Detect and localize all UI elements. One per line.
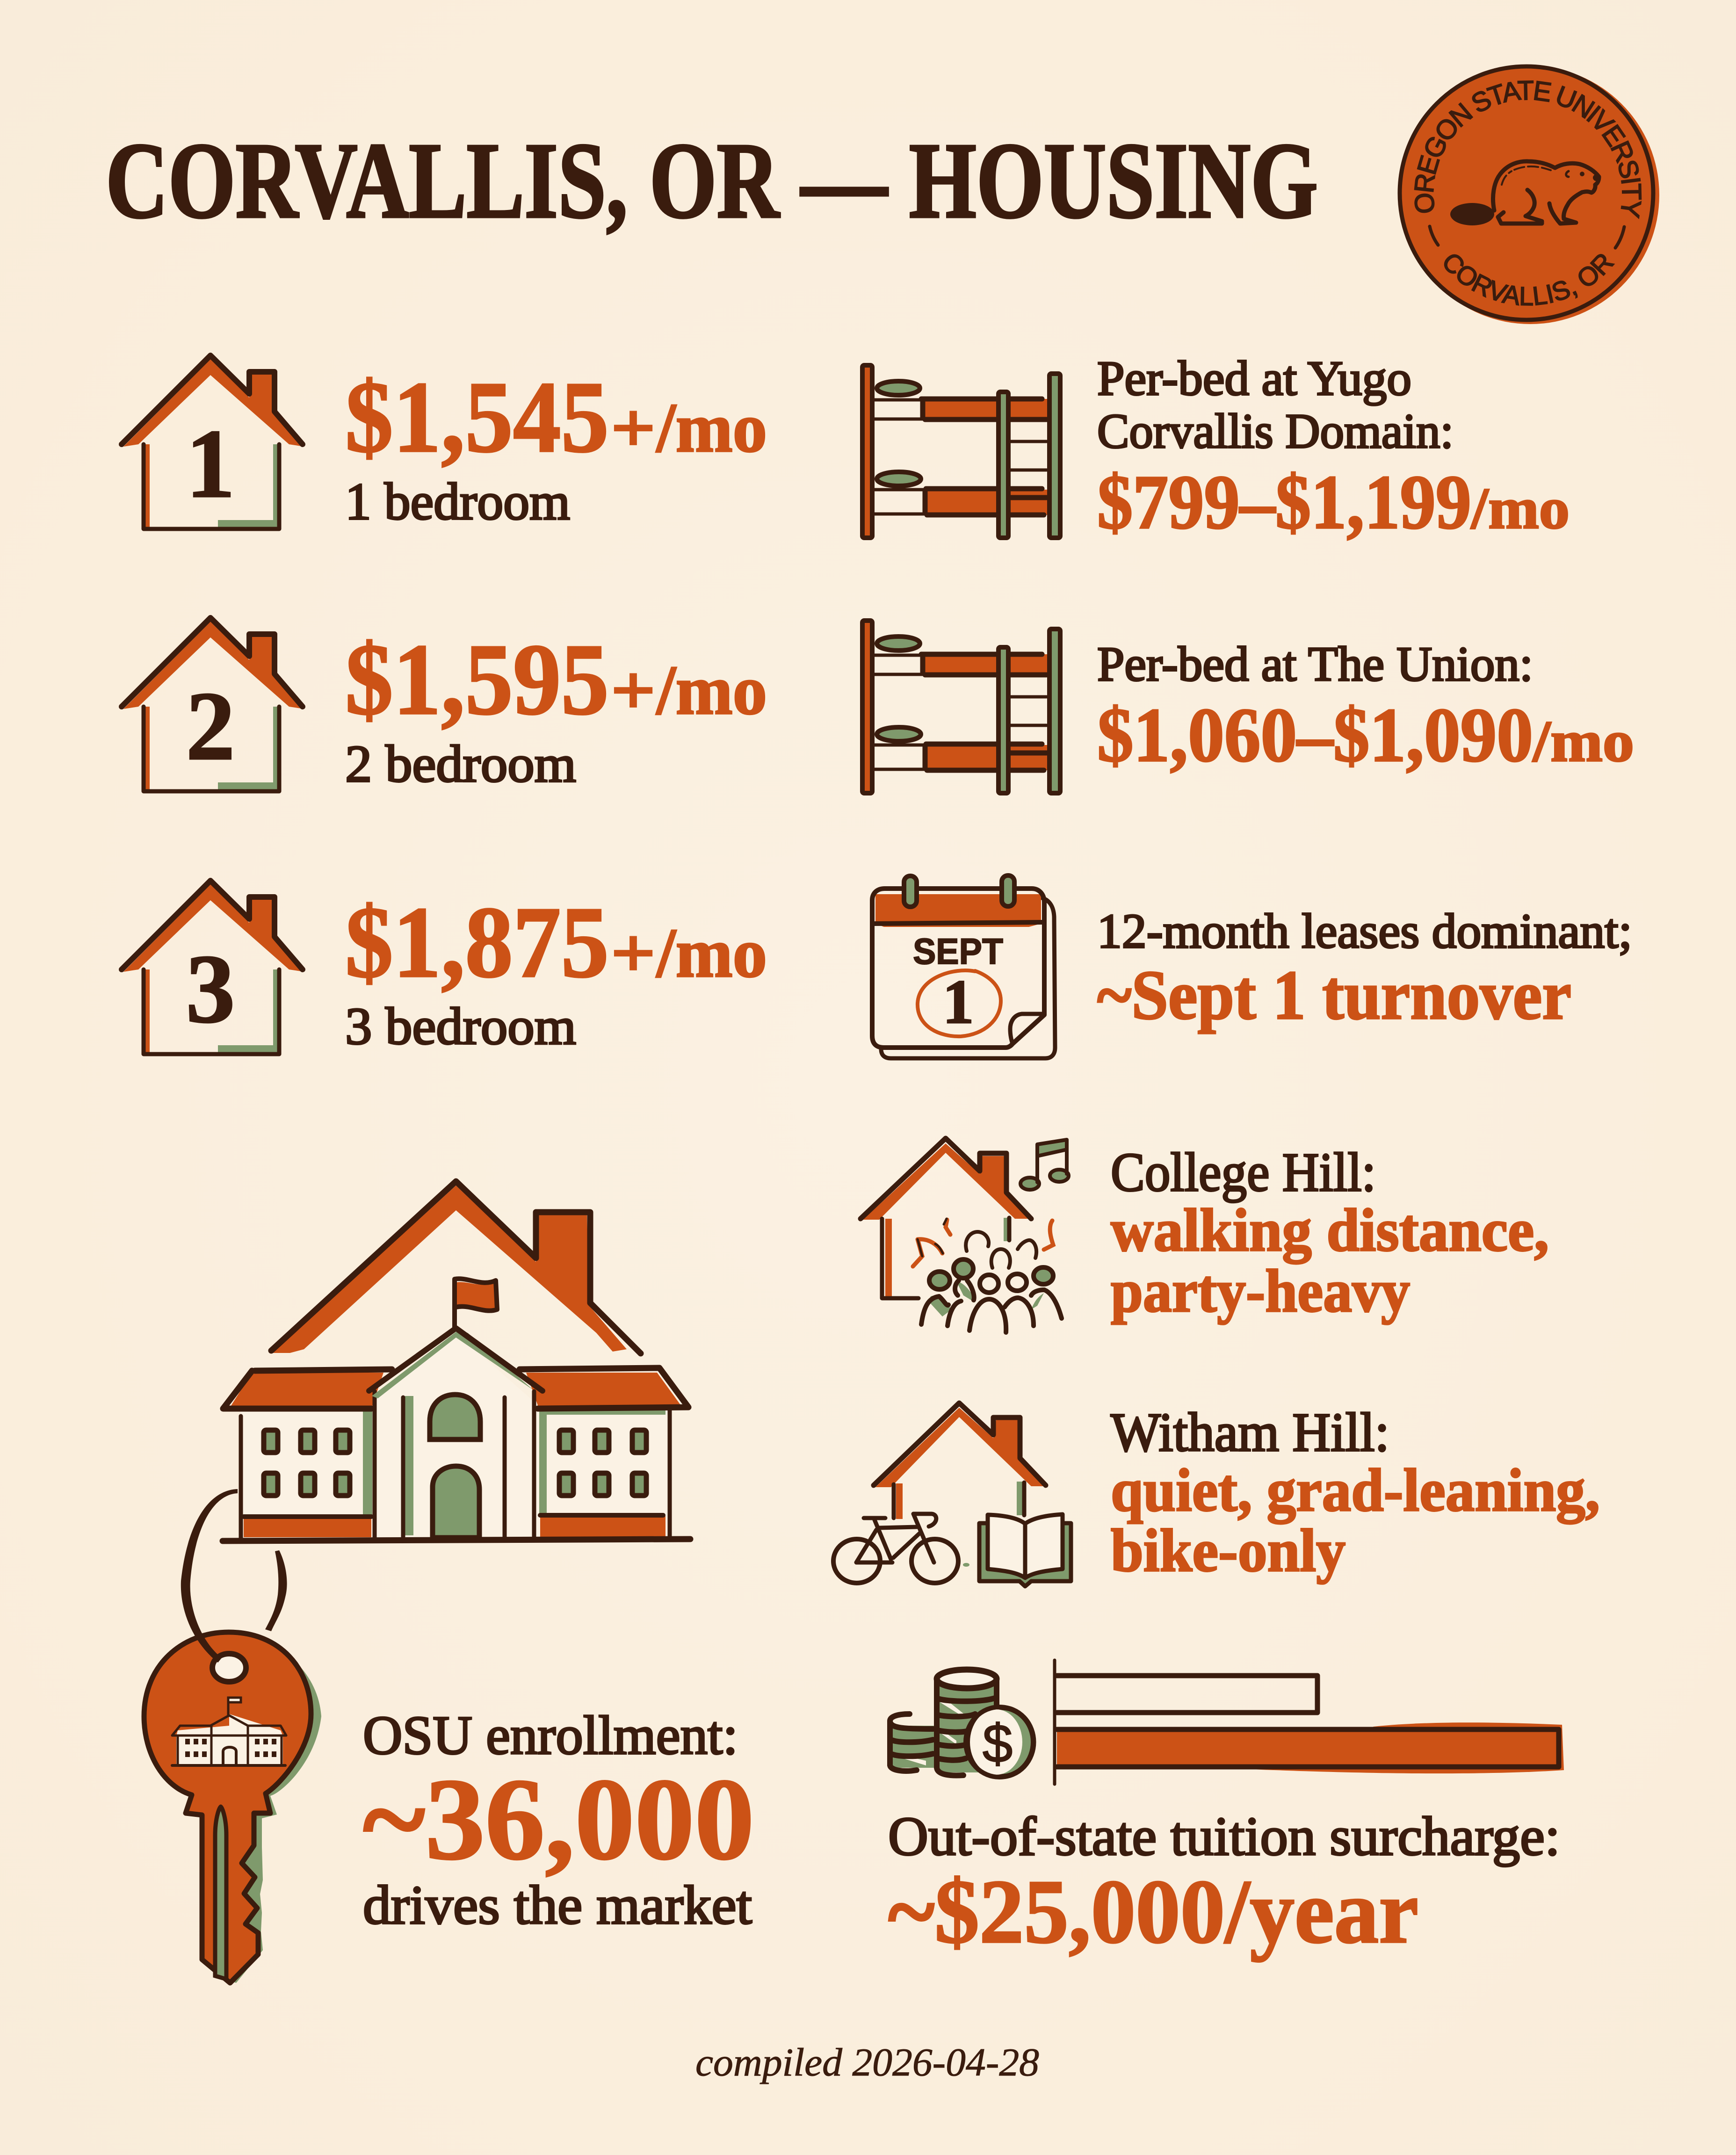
panel: 1 bedroom rent xyxy=(122,355,767,531)
title: CORVALLIS, OR — HOUSING xyxy=(106,121,1318,241)
icon: coin stacks xyxy=(890,1670,1034,1777)
music notes xyxy=(1020,1140,1069,1190)
icon: house 1: 1 xyxy=(186,410,235,518)
bar chart xyxy=(1055,1660,1564,1784)
text: College Hill: xyxy=(1111,1142,1376,1203)
text xyxy=(1097,351,1570,545)
panel: out-of-state tuition xyxy=(888,1660,1564,1962)
text xyxy=(1097,904,1632,1034)
orange confetti notes xyxy=(913,1219,1053,1266)
panel: The Union per-bed price xyxy=(862,621,1634,793)
dot xyxy=(963,1563,969,1567)
text: Per-bed at Yugo xyxy=(1097,351,1411,405)
icon: house 2: 2 xyxy=(186,672,235,781)
back row heads xyxy=(966,1232,1036,1268)
rent figure xyxy=(345,886,767,999)
wings xyxy=(223,1333,688,1539)
text: $1,060–$1,090 xyxy=(1097,692,1533,778)
flag xyxy=(455,1279,497,1328)
rent figure xyxy=(345,623,767,736)
icon: coin stacks: $ xyxy=(983,1713,1013,1774)
bicycle xyxy=(833,1514,958,1583)
text: Out-of-state tuition surcharge: xyxy=(888,1806,1560,1867)
central gable xyxy=(369,1328,542,1537)
icon: quiet house with bicycle and book xyxy=(833,1403,1071,1586)
arched window and door xyxy=(430,1395,480,1538)
text xyxy=(1111,1142,1549,1325)
icon: house 3: 3 xyxy=(186,935,235,1043)
panel: 3 bedroom rent xyxy=(122,881,767,1056)
seal text: bottom arc: CORVALLIS, OR xyxy=(1436,246,1619,311)
rent figure: $1,875 xyxy=(345,886,609,999)
icon: house 2 xyxy=(122,618,303,791)
icon: calendar: 1 xyxy=(943,967,974,1036)
panel: College Hill xyxy=(861,1138,1549,1332)
icon: house 3 xyxy=(122,881,303,1054)
text xyxy=(1097,636,1634,778)
text: quiet, grad-leaning, xyxy=(1111,1457,1600,1524)
rent figure: /mo xyxy=(656,651,767,729)
text: walking distance, xyxy=(1111,1197,1549,1264)
panel: OSU enrollment xyxy=(363,1705,754,1936)
icon: key xyxy=(144,1632,321,1983)
text xyxy=(888,1806,1560,1962)
rent figure: + xyxy=(611,651,656,729)
main roof xyxy=(271,1181,641,1353)
rent figure: /mo xyxy=(656,914,767,992)
text: /mo xyxy=(1470,477,1570,541)
icon: calendar xyxy=(872,875,1055,1058)
text: party-heavy xyxy=(1111,1258,1410,1325)
icon: party house xyxy=(861,1138,1069,1332)
panel: Witham Hill xyxy=(833,1402,1600,1586)
text: $799–$1,199 xyxy=(1097,459,1471,545)
panel: OSU enrollment: ~36,000 xyxy=(363,1755,754,1884)
rent figure: $1,595 xyxy=(345,623,609,736)
label: 3 bedroom xyxy=(345,998,576,1056)
icon: house 1 xyxy=(122,355,303,529)
text: bike-only xyxy=(1111,1517,1345,1584)
icon: bunk bed xyxy=(862,365,1060,538)
icon: calendar: SEPT xyxy=(913,931,1003,972)
panel: OSU enrollment: OSU enrollment: xyxy=(363,1705,738,1766)
text: Witham Hill: xyxy=(1111,1402,1389,1463)
windows xyxy=(264,1430,646,1496)
book xyxy=(979,1514,1071,1586)
text: /mo xyxy=(1532,709,1634,774)
ground line xyxy=(223,1539,690,1541)
illustration: school building and key xyxy=(144,1181,690,1983)
footer date: compiled 2026-04-28 xyxy=(695,2040,1039,2084)
beaver xyxy=(1450,161,1599,225)
text: ~Sept 1 turnover xyxy=(1097,956,1571,1034)
text: 12-month leases dominant; xyxy=(1097,904,1632,958)
icon: mini building xyxy=(172,1698,286,1765)
panel: lease turnover xyxy=(872,875,1632,1058)
rent figure: + xyxy=(611,914,656,992)
panel: OSU enrollment: drives the market xyxy=(363,1874,752,1936)
rent figure xyxy=(345,361,767,474)
rent figure: $1,545 xyxy=(345,361,609,474)
text xyxy=(1111,1402,1600,1584)
seal text: top arc: OREGON STATE UNIVERSITY xyxy=(1409,75,1647,220)
label: 2 bedroom xyxy=(345,735,576,793)
text: Corvallis Domain: xyxy=(1097,404,1454,458)
rent figure: /mo xyxy=(656,389,767,467)
label: 1 bedroom xyxy=(345,473,570,531)
text: ~$25,000/year xyxy=(888,1861,1418,1962)
icon: Oregon State University seal xyxy=(1400,66,1659,324)
panel: Yugo Corvallis Domain per-bed price xyxy=(862,351,1570,545)
rent figure: + xyxy=(611,389,656,467)
panel: 2 bedroom rent xyxy=(122,618,767,793)
key ring xyxy=(181,1489,287,1663)
icon: bunk bed xyxy=(862,621,1060,793)
crowd xyxy=(921,1259,1062,1332)
text: Per-bed at The Union: xyxy=(1097,636,1533,691)
